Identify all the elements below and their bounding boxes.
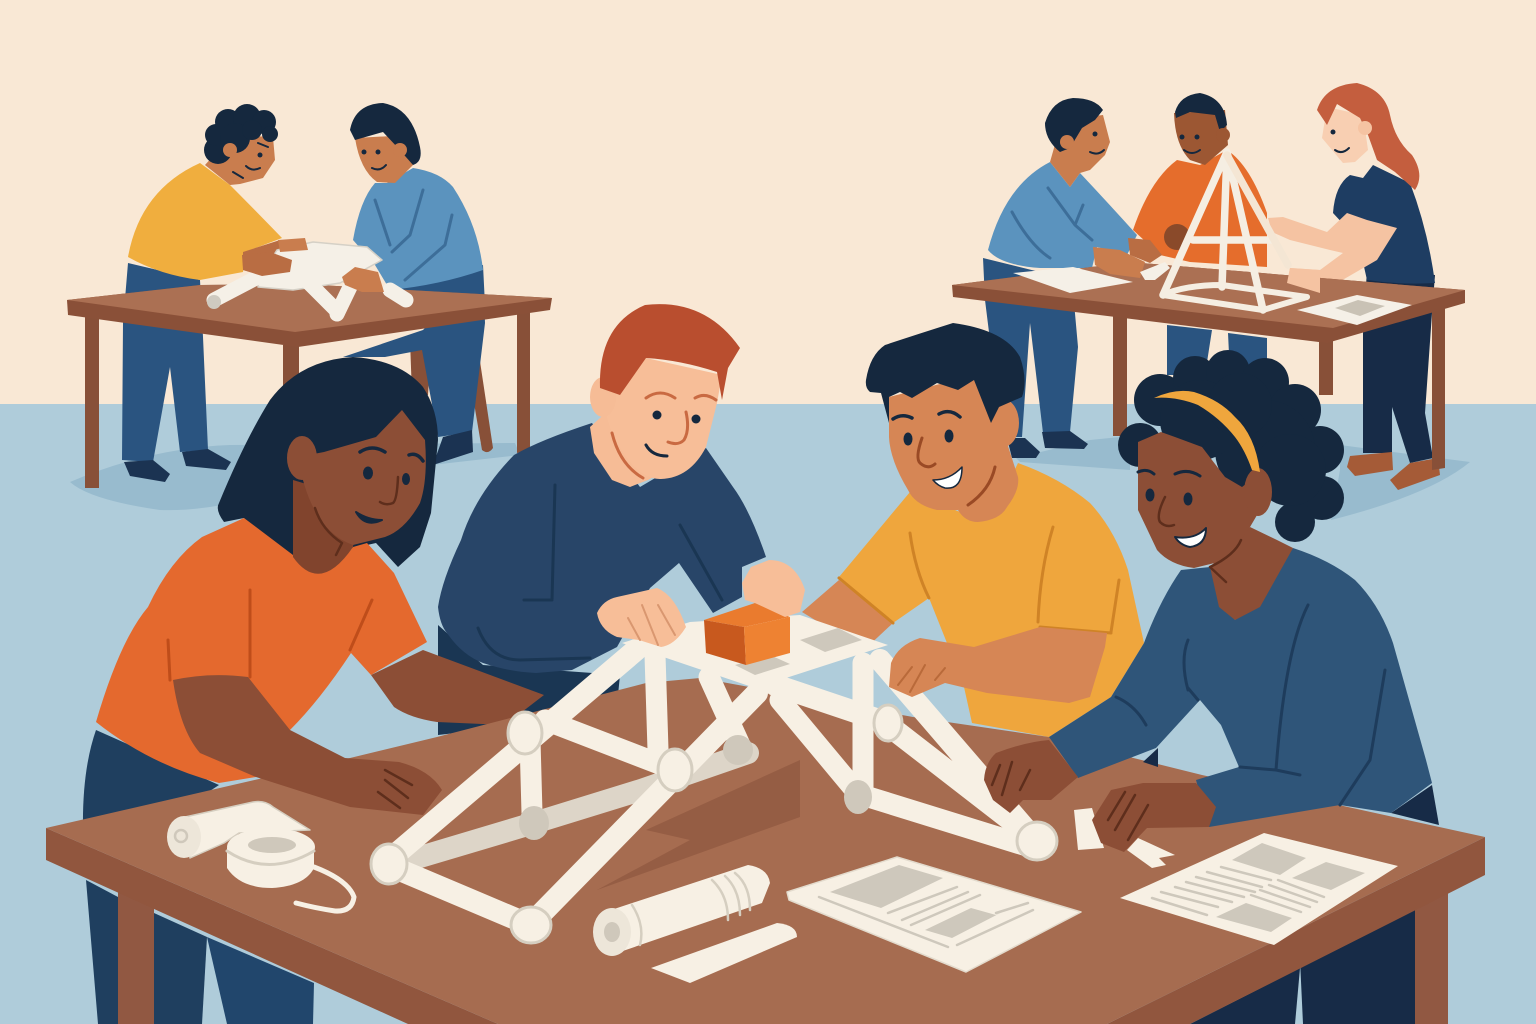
hands on bridge	[597, 560, 1107, 703]
table top back-left	[67, 284, 552, 488]
headband	[1154, 391, 1260, 472]
background floor	[0, 404, 1536, 1024]
paper sheet left	[1013, 267, 1133, 293]
table leg right	[1415, 880, 1448, 1024]
floor shadow left	[70, 443, 520, 510]
hands on back-left model	[242, 238, 384, 292]
hand: red hair right	[742, 560, 805, 617]
far arm	[371, 650, 544, 725]
ear	[287, 436, 317, 480]
neck	[1210, 527, 1293, 620]
student: red hair front	[438, 304, 766, 735]
sweater	[1049, 548, 1432, 827]
front table	[46, 678, 1485, 1024]
ear	[1244, 468, 1272, 516]
student: headband front-right	[984, 350, 1439, 868]
group: back-right students and table	[952, 83, 1470, 520]
shadow under bridge	[597, 760, 800, 890]
student: blue shirt back-left	[342, 103, 485, 465]
table leg left	[118, 890, 154, 1024]
trousers	[438, 625, 620, 735]
student: orange shirt back-right	[1133, 93, 1267, 375]
group: back-left students and table	[67, 103, 552, 510]
back arm	[802, 580, 893, 650]
hands of back-right students	[1093, 238, 1320, 293]
trousers third leg	[207, 937, 314, 1024]
finger lines	[992, 762, 1148, 840]
table top face	[46, 678, 1485, 1024]
trousers	[83, 730, 219, 850]
back struts	[530, 655, 740, 813]
front struts	[389, 650, 1035, 925]
face features	[893, 412, 995, 505]
hand: yellow shirt	[889, 627, 1107, 703]
table top back-right	[952, 262, 1465, 470]
hair	[1118, 350, 1344, 542]
student: near arm front-left	[173, 675, 442, 815]
neck	[293, 480, 360, 574]
trousers under table	[86, 880, 118, 1024]
trousers second leg	[154, 913, 207, 1024]
hand lines yellow	[898, 665, 945, 692]
newspaper sheet right	[1120, 833, 1398, 945]
ear	[590, 377, 616, 417]
orange block on bridge	[704, 603, 790, 665]
bridge deck	[622, 615, 888, 688]
paper sheet right	[1297, 295, 1412, 325]
student: yellow shirt back-left	[122, 104, 306, 482]
bridge joints	[371, 705, 1057, 943]
student: blue shirt back-right	[983, 98, 1137, 458]
rear joints	[519, 806, 549, 840]
hair back	[218, 357, 438, 567]
chair leg	[1000, 300, 1012, 350]
face	[298, 410, 426, 545]
tape and paper roll	[167, 802, 354, 911]
folded paper strip	[651, 923, 797, 983]
sweater	[438, 423, 766, 673]
paper pyramid model	[1163, 152, 1307, 310]
background wall	[0, 0, 1536, 405]
trousers right front	[1190, 968, 1300, 1024]
student: red hair back-right	[1268, 83, 1440, 490]
paper roll on table	[593, 865, 770, 956]
face	[889, 375, 1007, 510]
hand: red hair left	[597, 588, 686, 647]
newspaper sheet center	[787, 857, 1081, 972]
head	[601, 358, 722, 479]
stool	[410, 335, 493, 452]
hair	[866, 323, 1025, 423]
shirt	[96, 518, 427, 783]
neck	[590, 400, 680, 487]
paper model back-left	[207, 242, 406, 314]
student: orange shirt front-left	[83, 357, 544, 850]
lower trousers	[1391, 785, 1439, 825]
paper bridge model	[371, 615, 1057, 943]
hand lines left	[628, 605, 675, 645]
trousers right back	[1300, 900, 1415, 1024]
face features	[315, 448, 423, 555]
floor shadow right	[1016, 436, 1470, 520]
shirt	[839, 463, 1144, 737]
face	[1138, 432, 1260, 568]
table side faces	[46, 828, 1485, 1024]
student: yellow shirt front	[802, 323, 1144, 737]
hair	[600, 304, 740, 400]
rear rail in shade	[410, 753, 748, 860]
face features	[612, 393, 716, 478]
face features	[1138, 470, 1241, 582]
deck print	[735, 628, 862, 675]
hand right	[1092, 783, 1216, 852]
hand left	[984, 740, 1078, 813]
tape piece held	[1074, 808, 1175, 868]
ear	[987, 399, 1019, 447]
neck	[958, 443, 1018, 522]
